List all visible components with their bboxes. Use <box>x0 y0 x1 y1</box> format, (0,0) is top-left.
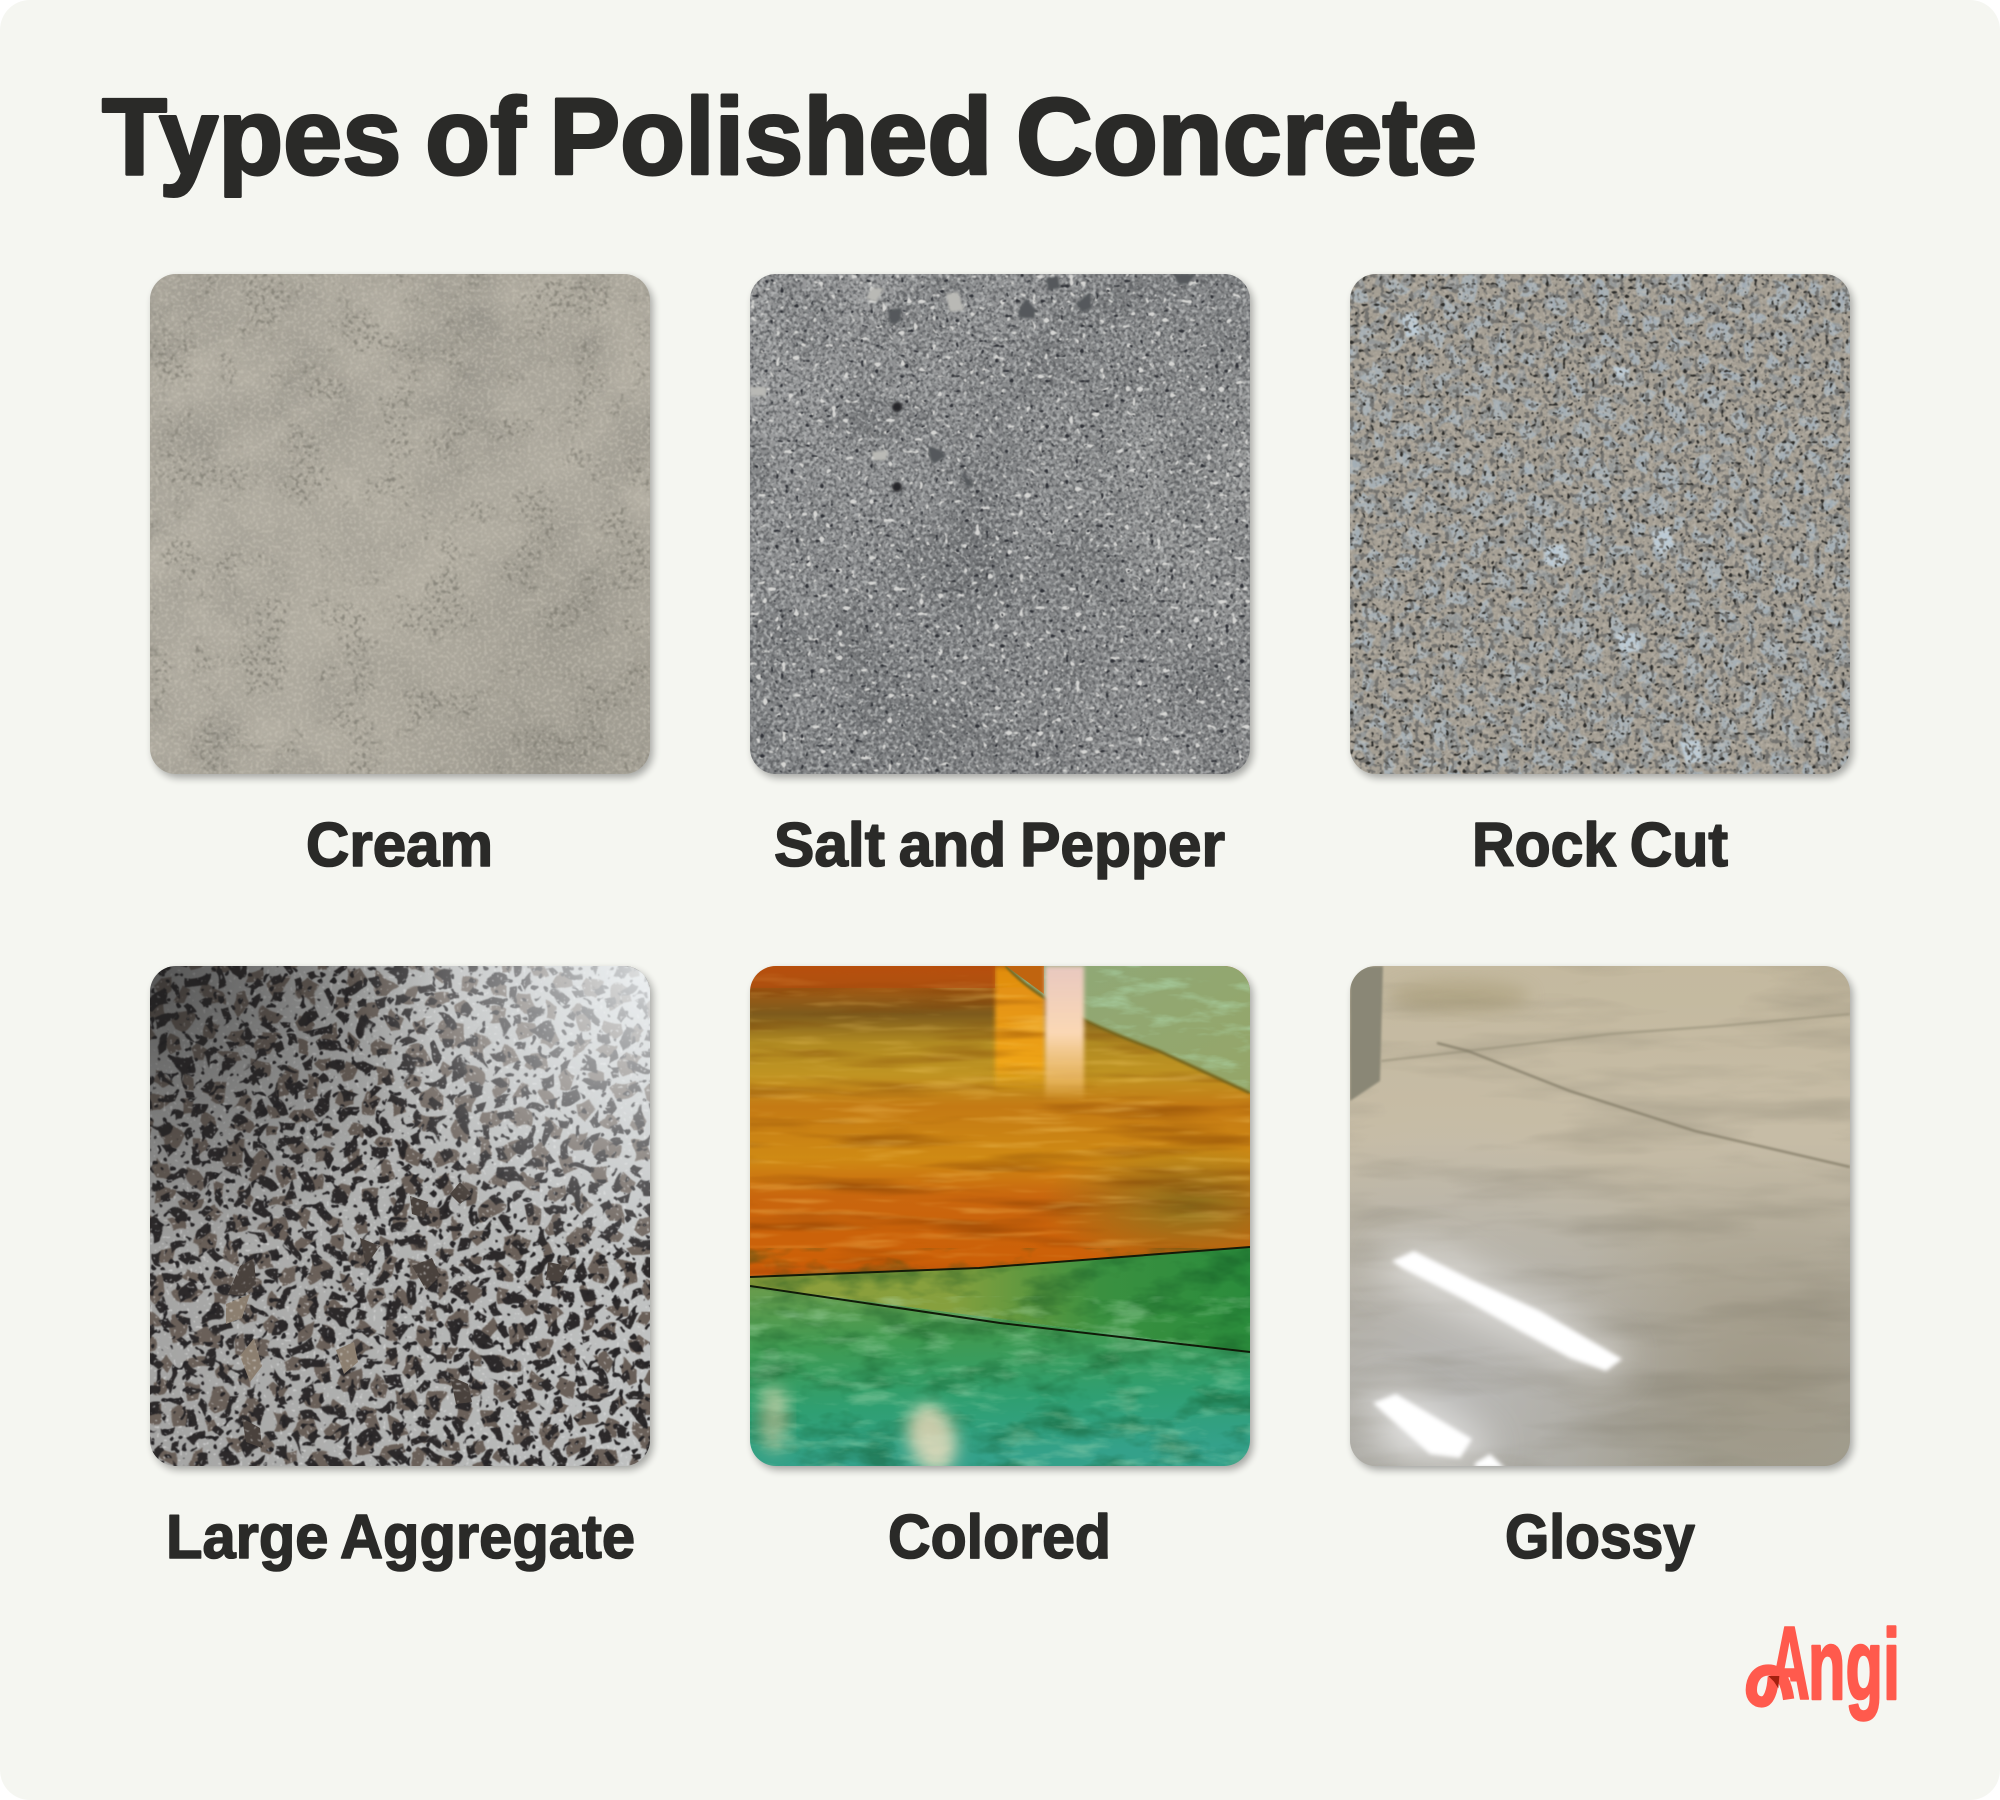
logo: Angi: ngi <box>1808 1609 1900 1721</box>
large aggregate chips <box>228 1182 568 1448</box>
label: cream: Cream <box>306 811 493 880</box>
image: colored concrete <box>748 965 1258 1475</box>
image: glossy concrete <box>1350 966 1853 1470</box>
floor reflections <box>899 1398 965 1478</box>
glare halo <box>1380 1241 1625 1381</box>
image: large aggregate concrete <box>148 965 658 1475</box>
dark and light aggregate chips <box>750 274 1196 492</box>
logo: Angi: A <box>1769 1606 1810 1722</box>
glare streak <box>1392 1251 1622 1371</box>
label: glossy: Glossy <box>1505 1503 1695 1572</box>
reflected light column <box>1045 966 1084 1101</box>
logo: Angi <box>1751 1606 1900 1722</box>
lower teal green area <box>750 1286 1250 1466</box>
seam lines <box>750 1247 1250 1277</box>
image: cream concrete <box>150 274 653 778</box>
green wedge <box>750 1247 1250 1352</box>
title: Types of Polished Concrete <box>102 76 1477 198</box>
image: salt and pepper concrete <box>750 274 1253 778</box>
upper right green area <box>1006 966 1250 1093</box>
seams <box>1381 1014 1850 1061</box>
label: colored: Colored <box>888 1503 1111 1572</box>
label: rock cut: Rock Cut <box>1472 811 1728 880</box>
grey left strip <box>1350 966 1383 1101</box>
large pale stones <box>1402 312 1702 764</box>
glare streak lower <box>1373 1394 1472 1458</box>
image: rock cut concrete <box>1348 273 1858 783</box>
label: salt and pepper: Salt and Pepper <box>774 811 1225 880</box>
label: large aggregate: Large Aggregate <box>166 1503 635 1572</box>
